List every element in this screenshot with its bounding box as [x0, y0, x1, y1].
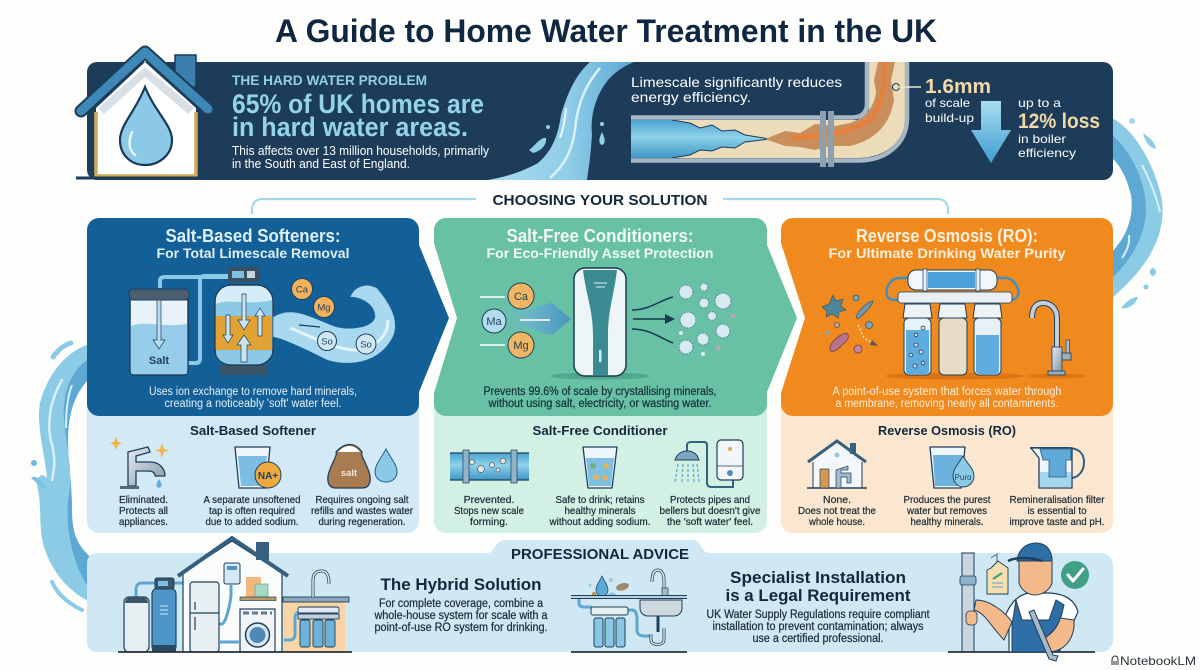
- problem text block: 65% of UK homes are: [232, 89, 484, 119]
- comparison column: limescale: None.: [823, 494, 851, 506]
- problem text block: THE HARD WATER PROBLEM: [232, 72, 427, 88]
- comparison column: sodium: [904, 494, 991, 528]
- stat: scale build-up: build-up: [925, 111, 974, 125]
- comparison column: sodium: due to added sodium.: [206, 516, 298, 528]
- comparison column: limescale: forming.: [470, 516, 508, 528]
- icon: filter jug: [1030, 448, 1084, 488]
- heading: Reverse Osmosis (RO):: [856, 226, 1038, 246]
- description: [484, 386, 716, 410]
- comparison column: sodium: water but removes: [906, 505, 987, 517]
- subheading: Reverse Osmosis (RO): [878, 423, 1016, 438]
- energy efficiency statement: Limescale significantly reduces: [631, 74, 842, 90]
- title: A Guide to Home Water Treatment in the UK: [275, 13, 937, 49]
- icon: sparkling tap: [110, 437, 169, 489]
- section heading: choosing your solution: [252, 192, 948, 214]
- stat: scale build-up: 1.6mm: [925, 76, 991, 98]
- hybrid whole-house illustration: [118, 538, 352, 652]
- comparison column: sodium: Safe to drink; retains: [556, 494, 644, 506]
- comparison column: limescale: Does not treat the: [798, 505, 876, 517]
- plumber illustration: [948, 543, 1095, 661]
- panel: salt-free conditioners: [434, 218, 797, 533]
- heading: [156, 226, 350, 261]
- specialist installation text: use a certified professional.: [752, 633, 884, 645]
- softener system illustration: Ca: [296, 284, 309, 296]
- specialist installation text: UK Water Supply Regulations require compliant: [706, 609, 930, 621]
- icon: salt sack and drop: salt: [341, 468, 358, 479]
- under-sink RO illustration: [571, 570, 687, 652]
- comparison column: upkeep: the 'soft water' feel.: [667, 516, 753, 528]
- icon: house with tap: [807, 441, 867, 488]
- specialist installation text: installation to prevent contamination; always: [712, 621, 924, 633]
- description: Uses ion exchange to remove hard minerals,: [149, 386, 357, 398]
- comparison column: upkeep: during regeneration.: [318, 516, 406, 528]
- comparison column: upkeep: is essential to: [1028, 505, 1087, 517]
- icon: glass with pure drop: Puro: [955, 473, 972, 482]
- specialist installation text: is a Legal Requirement: [726, 586, 911, 605]
- hybrid solution text: For complete coverage, combine a: [379, 598, 544, 610]
- softener system illustration: Salt: [149, 355, 169, 367]
- heading: [828, 226, 1066, 261]
- description: A point-of-use system that forces water through: [832, 386, 1062, 398]
- comparison column: upkeep: refills and wastes water: [311, 505, 413, 517]
- hybrid solution text: point-of-use RO system for drinking.: [374, 622, 548, 634]
- comparison column: limescale: Stops new scale: [454, 505, 524, 517]
- panel: reverse osmosis: [781, 218, 1113, 533]
- comparison column: limescale: Prevented.: [464, 494, 514, 506]
- comparison column: upkeep: bellers but doesn't give: [660, 505, 761, 517]
- comparison column: upkeep: [660, 494, 761, 528]
- heading: PROFESSIONAL ADVICE: [511, 546, 689, 563]
- comparison column: upkeep: Remineralisation filter: [1010, 494, 1105, 506]
- problem text block: in the South and East of England.: [232, 157, 410, 171]
- arrow: efficiency falling: [971, 101, 1011, 163]
- comparison column: sodium: A separate unsoftened: [204, 494, 301, 506]
- softener system illustration: [129, 267, 395, 375]
- panel: salt-based softeners: [87, 218, 449, 533]
- left water swirl: [31, 343, 90, 610]
- comparison column: limescale: Eliminated.: [119, 494, 168, 506]
- comparison column: limescale: whole house.: [808, 516, 865, 528]
- softener system illustration: So: [360, 340, 372, 350]
- stat: boiler efficiency loss: 12% loss: [1018, 110, 1100, 133]
- heading: For Total Limescale Removal: [156, 245, 350, 261]
- specialist installation text: Specialist Installation: [730, 568, 906, 587]
- comparison column: sodium: without adding sodium.: [549, 516, 650, 528]
- icon: salt sack and drop: [328, 444, 397, 488]
- notebooklm watermark: NotebookLM: [1120, 654, 1196, 668]
- icon: house with water drop: [76, 52, 208, 178]
- reverse osmosis system illustration: [822, 269, 1085, 380]
- comparison column: sodium: healthy minerals: [564, 505, 636, 517]
- comparison column: limescale: [119, 494, 168, 528]
- panel: hard water problem banner: [76, 52, 1113, 180]
- stat: scale build-up: [925, 76, 991, 125]
- icon: glass with sodium badge: NA+: [258, 471, 278, 482]
- comparison column: limescale: Protects all: [119, 505, 168, 517]
- description: Prevents 99.6% of scale by crystallising minerals,: [484, 386, 716, 398]
- icon: glass with sodium badge: [235, 447, 281, 488]
- stat: boiler efficiency loss: in boiler: [1018, 132, 1066, 146]
- comparison column: upkeep: Requires ongoing salt: [316, 494, 409, 506]
- softener system illustration: So: [321, 336, 333, 348]
- comparison column: sodium: tap is often required: [209, 505, 295, 517]
- icon: shower and boiler: [675, 440, 743, 487]
- conditioner illustration: Ca: [514, 291, 529, 303]
- description: [832, 386, 1062, 410]
- comparison column: sodium: [549, 494, 650, 528]
- problem text block: in hard water areas.: [232, 112, 468, 142]
- description: without using salt, electricity, or wasting water.: [488, 398, 712, 410]
- softener system illustration: Mg: [317, 302, 331, 314]
- icon: clean pipe: [450, 450, 529, 483]
- subheading: Salt-Free Conditioner: [532, 423, 668, 438]
- water stream: [488, 62, 634, 180]
- stat: scale build-up: of scale: [925, 96, 970, 110]
- stat: boiler efficiency loss: up to a: [1018, 96, 1061, 110]
- problem text block: [232, 72, 490, 171]
- specialist installation text: [706, 568, 930, 645]
- comparison column: limescale: [454, 494, 524, 528]
- conditioner illustration: Ma: [486, 316, 503, 328]
- hybrid solution text: whole-house system for scale with a: [374, 610, 548, 622]
- comparison column: sodium: healthy minerals.: [910, 516, 984, 528]
- panel: professional advice: [87, 538, 1113, 661]
- subheading: Salt-Based Softener: [190, 423, 316, 438]
- heading: [486, 226, 714, 261]
- heading: For Eco-Friendly Asset Protection: [486, 245, 714, 261]
- heading: Salt-Free Conditioners:: [506, 226, 694, 246]
- conditioner illustration: [480, 268, 736, 380]
- comparison column: sodium: Produces the purest: [904, 494, 991, 506]
- pipe with limescale build-up: [631, 62, 921, 167]
- icon: glass with minerals: [583, 447, 617, 488]
- description: a membrane, removing nearly all contaminents.: [836, 398, 1058, 410]
- section heading: choosing your solution: CHOOSING YOUR SOLUTION: [492, 192, 708, 209]
- conditioner illustration: Mg: [513, 340, 529, 352]
- hybrid solution text: The Hybrid Solution: [380, 575, 542, 594]
- hybrid solution text: [374, 575, 548, 634]
- heading: For Ultimate Drinking Water Purity: [828, 245, 1066, 261]
- problem text block: This affects over 13 million households, primarily: [232, 144, 490, 158]
- energy efficiency statement: energy efficiency.: [631, 89, 751, 105]
- comparison column: limescale: appliances.: [119, 516, 168, 528]
- comparison column: upkeep: Protects pipes and: [670, 494, 750, 506]
- right water swirl: [1112, 118, 1163, 308]
- stat: boiler efficiency loss: [1018, 96, 1100, 160]
- comparison column: upkeep: [311, 494, 413, 528]
- comparison column: sodium: [204, 494, 301, 528]
- comparison column: limescale: [798, 494, 876, 528]
- energy efficiency statement: [631, 74, 842, 105]
- comparison column: upkeep: improve taste and pH.: [1010, 516, 1104, 528]
- description: creating a noticeably 'soft' water feel.: [164, 398, 342, 410]
- comparison column: upkeep: [1010, 494, 1105, 528]
- icon: glass with pure drop: [930, 447, 974, 488]
- description: [149, 386, 357, 410]
- heading: Salt-Based Softeners:: [166, 226, 340, 246]
- stat: boiler efficiency loss: efficiency: [1018, 146, 1076, 160]
